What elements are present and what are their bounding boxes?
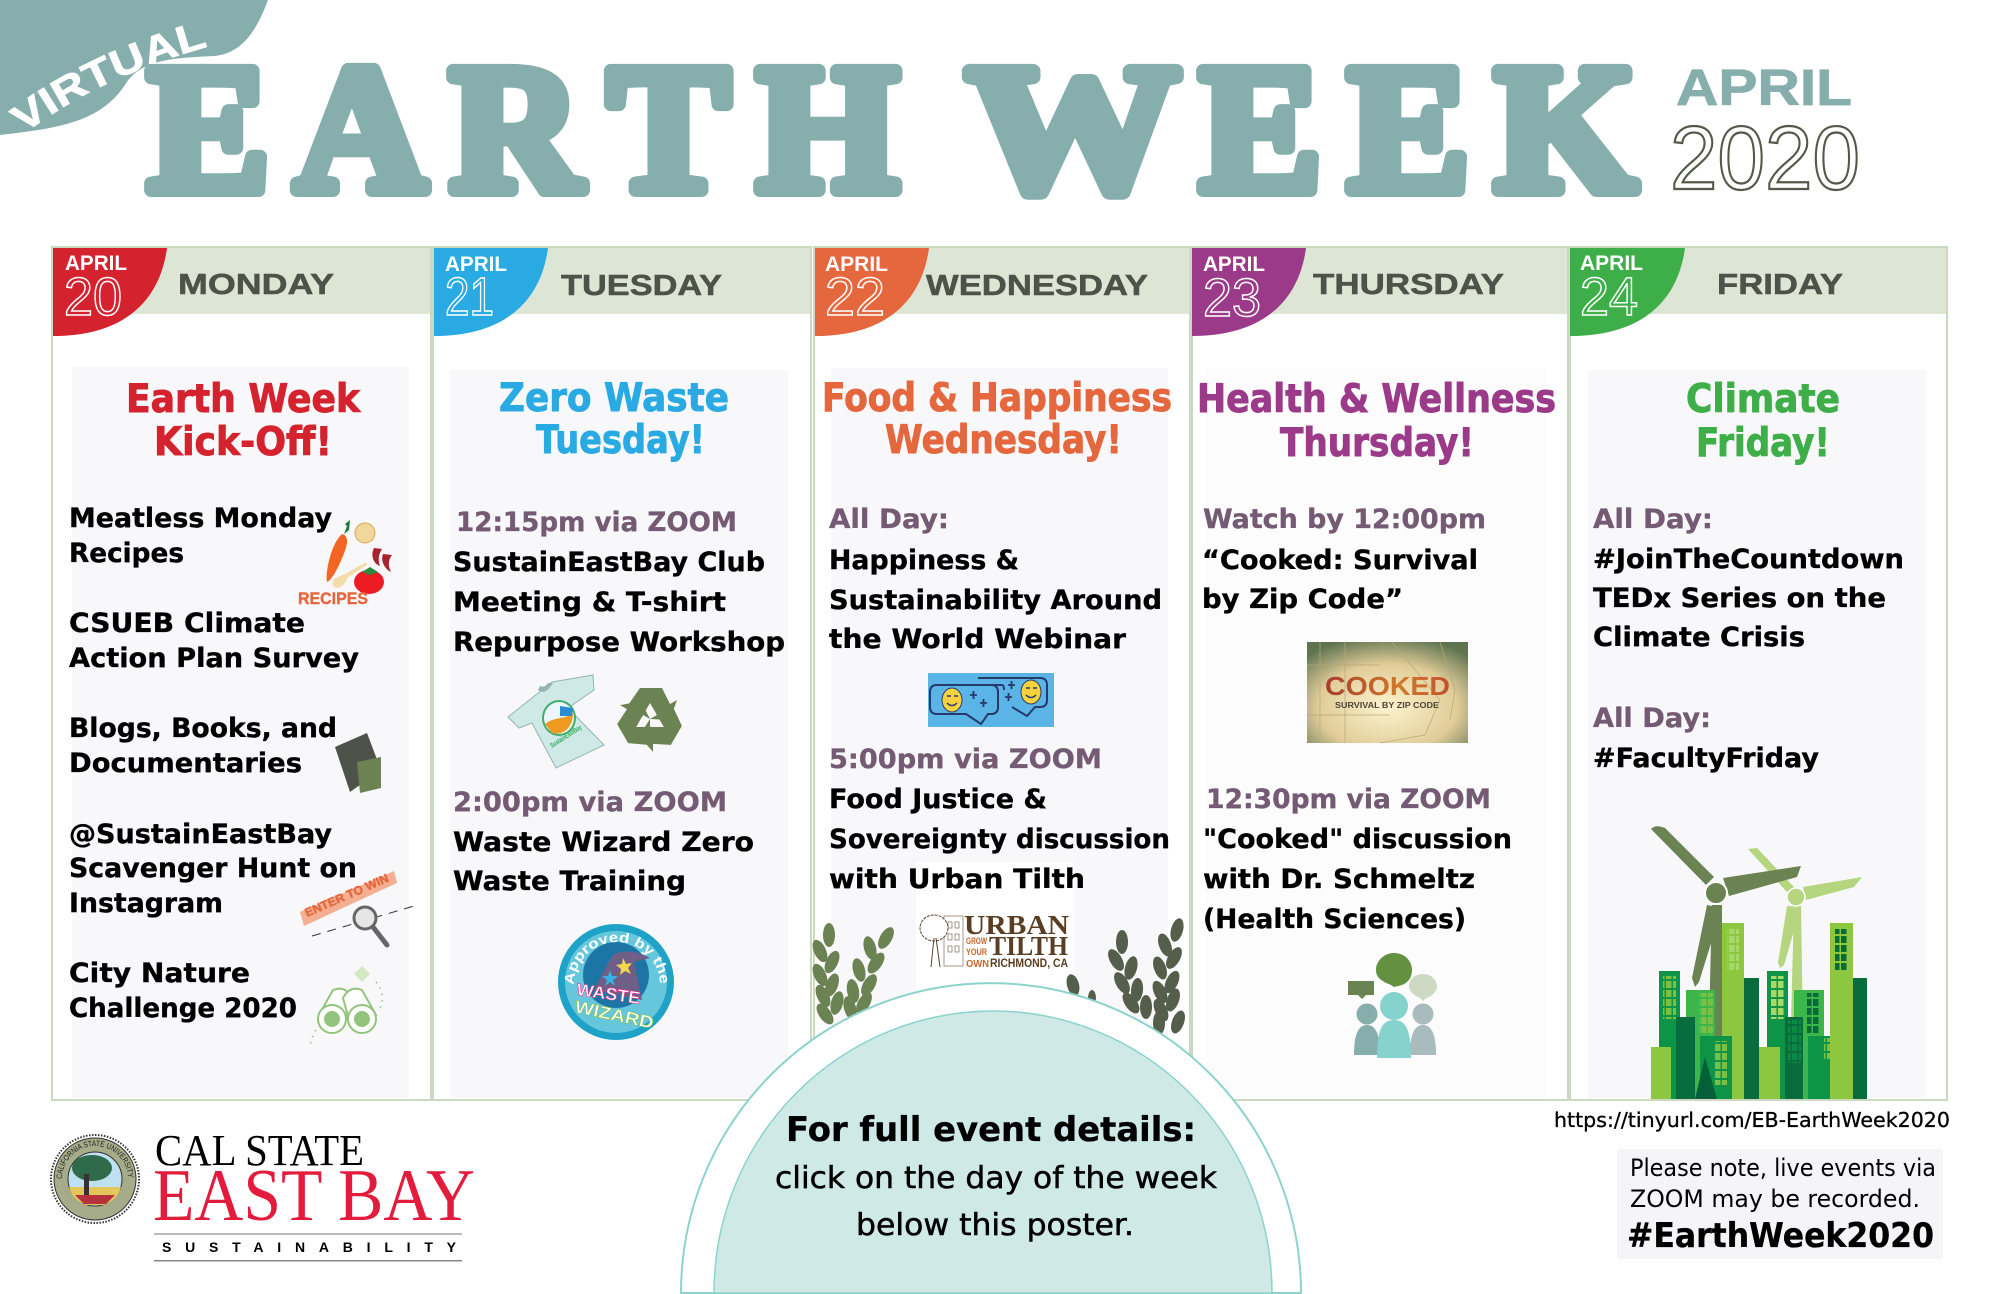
event: waste wizard: Waste Wizard Zero	[453, 827, 754, 858]
event list: Recipes	[69, 538, 184, 569]
event: discussion: with Dr. Schmeltz	[1203, 864, 1475, 895]
badge: April 20	[53, 248, 167, 336]
event list: Meatless Monday	[69, 503, 332, 534]
note: recording notice and hashtag	[1617, 1149, 1943, 1259]
callout: event details semicircle: below this poster.	[856, 1208, 1134, 1243]
logo: Urban Tilth: YOUR	[966, 947, 987, 957]
event: food justice: 5:00pm via ZOOM	[829, 744, 1102, 775]
event: food justice: Sovereignty discussion	[829, 824, 1170, 855]
image: Cooked poster	[1307, 642, 1468, 743]
logo: Cal State East Bay wordmark	[153, 1126, 475, 1262]
event: webinar: the World Webinar	[829, 624, 1127, 655]
heading	[1686, 377, 1840, 466]
event: waste wizard	[453, 787, 754, 897]
leaves right	[1064, 917, 1188, 1035]
event: club meeting: Meeting & T-shirt	[453, 587, 726, 618]
badge: April 22: APRIL	[825, 253, 888, 276]
event: club meeting: 12:15pm via ZOOM	[456, 507, 737, 538]
event: film: by Zip Code”	[1202, 584, 1403, 615]
icon: recycle	[610, 688, 689, 758]
note: recording notice and hashtag: Please note, live events via	[1630, 1154, 1936, 1182]
event: webinar: Happiness &	[829, 545, 1019, 576]
heading: Friday!	[1696, 421, 1830, 466]
event: webinar	[829, 504, 1162, 655]
leaves left	[809, 923, 897, 1027]
logo: Cal State East Bay wordmark: CAL STATE	[155, 1126, 364, 1175]
logo: Urban Tilth	[920, 910, 1070, 970]
icon: enter to win magnifier: ENTER TO WIN	[303, 871, 391, 920]
title: Earth Week: EEK	[1200, 29, 1637, 230]
badge: April 23: 23	[1203, 268, 1261, 328]
event: webinar: All Day:	[829, 504, 949, 535]
panel: Tuesday	[432, 246, 812, 1101]
icon: waste wizard badge: WASTE	[575, 980, 641, 1008]
callout: event details semicircle: For full event details:	[786, 1110, 1196, 1150]
heading: Climate	[1686, 377, 1840, 422]
event: TEDx: All Day:	[1593, 504, 1713, 535]
event: club meeting: SustainEastBay Club	[453, 547, 765, 578]
icon: binoculars	[311, 966, 382, 1045]
event: Faculty Friday: #FacultyFriday	[1593, 743, 1819, 774]
logo: Urban Tilth: GROW	[966, 936, 987, 946]
badge: April 20: APRIL	[65, 252, 127, 275]
logo: Cal State East Bay wordmark: EAST BAY	[153, 1155, 475, 1237]
heading: Food & Happiness	[822, 376, 1172, 421]
event: waste wizard: 2:00pm via ZOOM	[453, 787, 727, 818]
event list: Challenge 2020	[69, 993, 297, 1024]
badge: April 23	[1192, 248, 1306, 336]
event: discussion: 12:30pm via ZOOM	[1206, 784, 1491, 815]
day name: MONDAY	[178, 269, 334, 301]
illustration: wind turbines and city	[1651, 826, 1867, 1099]
badge: April 22	[815, 248, 929, 336]
event: discussion: (Health Sciences)	[1203, 904, 1466, 935]
icon: recipes vegetables	[298, 520, 392, 608]
image: Cooked poster: COOKED	[1325, 671, 1450, 701]
icon: chat bubbles	[928, 673, 1054, 727]
logo: Cal State East Bay seal	[50, 1134, 140, 1224]
event: food justice	[829, 744, 1170, 895]
badge: April 20: 20	[64, 267, 122, 327]
panel: Monday	[52, 247, 431, 1100]
event list	[69, 503, 359, 1024]
event list: Action Plan Survey	[69, 643, 359, 674]
badge: April 21: APRIL	[445, 253, 507, 276]
date: April 2020: 2020	[1670, 109, 1860, 209]
event list: Scavenger Hunt on	[69, 853, 357, 884]
panel: Friday	[1570, 247, 1947, 1100]
badge: April 24: APRIL	[1580, 252, 1643, 275]
event: waste wizard: Waste Training	[453, 866, 686, 897]
icon: t-shirt: SustainEastBay	[549, 724, 583, 750]
event: club meeting: Repurpose Workshop	[453, 627, 785, 658]
event: webinar: Sustainability Around	[829, 585, 1162, 616]
event: film: Watch by 12:00pm	[1203, 504, 1486, 535]
title: Earth Week: EARTH	[148, 29, 899, 230]
day name: THURSDAY	[1313, 269, 1504, 301]
date: April 2020: APRIL	[1676, 59, 1852, 116]
panel: Thursday	[1192, 247, 1568, 1100]
logo: Urban Tilth: TILTH	[989, 931, 1068, 961]
event: discussion	[1203, 784, 1512, 935]
banner: virtual: VIRTUAL	[8, 26, 208, 128]
icon: waste wizard badge	[558, 924, 674, 1040]
logo: Cal State East Bay wordmark: SUSTAINABILITY	[162, 1239, 457, 1255]
badge: April 24: 24	[1580, 267, 1638, 327]
day name: WEDNESDAY	[926, 270, 1148, 302]
heading: Kick-Off!	[154, 420, 332, 465]
heading: Tuesday!	[536, 418, 705, 463]
icon: recipes vegetables: RECIPES	[298, 589, 368, 608]
day name: TUESDAY	[561, 270, 722, 302]
event: TEDx	[1593, 504, 1904, 653]
heading: Zero Waste	[499, 376, 729, 421]
heading	[822, 376, 1172, 463]
callout: event details semicircle	[681, 983, 1301, 1293]
icon: waste wizard badge: WIZARD	[573, 997, 655, 1033]
icon: waste wizard badge: Approved by the	[564, 932, 668, 984]
event: Faculty Friday	[1593, 703, 1819, 774]
event: TEDx: #JoinTheCountdown	[1593, 544, 1904, 575]
icon: enter to win magnifier	[300, 871, 414, 945]
event: food justice: with Urban Tilth	[829, 864, 1085, 895]
event: TEDx: Climate Crisis	[1593, 622, 1805, 653]
event list: Blogs, Books, and	[69, 713, 337, 744]
link: event URL: https://tinyurl.com/EB-EarthWeek2020	[1554, 1108, 1950, 1132]
badge: April 21	[434, 248, 548, 336]
event list: @SustainEastBay	[69, 819, 332, 850]
date: April 2020	[1670, 59, 1860, 209]
event: food justice: Food Justice &	[829, 784, 1047, 815]
icon: t-shirt	[508, 675, 604, 768]
image: Cooked poster: SURVIVAL BY ZIP CODE	[1335, 701, 1440, 710]
note: recording notice and hashtag: #EarthWeek2020	[1627, 1216, 1934, 1256]
day name: FRIDAY	[1717, 269, 1843, 301]
event: Faculty Friday: All Day:	[1593, 703, 1711, 734]
event list: CSUEB Climate	[69, 608, 305, 639]
heading	[126, 377, 361, 465]
badge: April 24	[1570, 248, 1685, 336]
heading: Health & Wellness	[1197, 377, 1556, 422]
logo: Urban Tilth: OWN	[966, 959, 989, 970]
heading: Wednesday!	[885, 418, 1122, 463]
event list: Instagram	[69, 888, 223, 919]
heading: Earth Week	[126, 377, 361, 422]
event: discussion: "Cooked" discussion	[1203, 824, 1512, 855]
logo: Urban Tilth: RICHMOND, CA	[990, 956, 1068, 970]
badge: April 21: 21	[445, 267, 494, 327]
white box behind logo	[916, 862, 1074, 1012]
event: TEDx: TEDx Series on the	[1593, 583, 1886, 614]
event list: Documentaries	[69, 748, 302, 779]
event list: City Nature	[69, 958, 250, 989]
note: recording notice and hashtag: ZOOM may be recorded.	[1630, 1185, 1920, 1213]
icon: books	[335, 733, 381, 793]
event: club meeting	[453, 507, 785, 658]
logo: Cal State East Bay seal: CALIFORNIA STATE UNIVERSITY	[56, 1140, 134, 1178]
badge: April 22: 22	[825, 267, 885, 327]
heading: Thursday!	[1280, 421, 1474, 466]
callout: event details semicircle: click on the day of the week	[775, 1161, 1218, 1196]
panel: Wednesday	[809, 247, 1190, 1100]
banner: virtual	[0, 0, 268, 135]
event: film	[1202, 504, 1486, 615]
logo: Urban Tilth: URBAN	[964, 910, 1070, 940]
badge: April 23: APRIL	[1203, 253, 1265, 276]
event: film: “Cooked: Survival	[1202, 545, 1478, 576]
title: Earth Week: W	[967, 29, 1179, 230]
heading	[1197, 377, 1556, 466]
icon: people talking	[1348, 953, 1437, 1058]
heading	[499, 376, 729, 463]
